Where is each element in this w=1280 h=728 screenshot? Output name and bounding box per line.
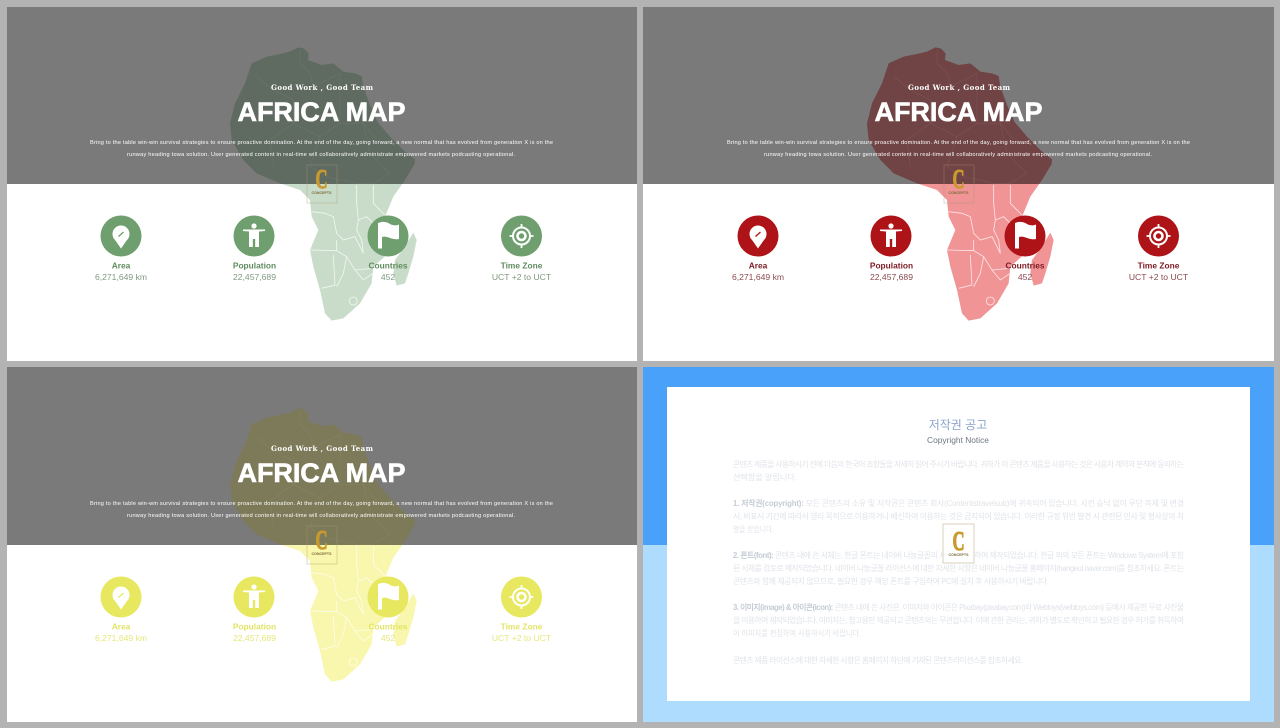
notice body: 콘텐츠 제품 라이선스에 대한 자세한 사항은 홈페이지 하단에 기재된 콘텐츠라이선스를 참조하세요. [733,655,1023,665]
tagline: Good Work , Good Team [271,444,374,453]
map of Africa [867,47,1054,321]
description [90,501,553,519]
stat: time zone [492,216,552,282]
stat: area: 6,271,649 km [732,272,784,282]
stat: time zone [492,576,552,643]
stat: area [95,216,147,282]
notice body: 이 이미지를 편집하여 사용하시기 바랍니다. [733,628,861,638]
map of Africa [230,408,417,682]
stat: area: Area [112,260,131,270]
panel: red slide [643,7,1274,361]
stat: population: 22,457,689 [233,272,276,282]
stat: population: Population [233,622,276,632]
notice body: 벌을 받습니다. [733,524,774,534]
stat: countries: Countries [1005,260,1045,270]
logo: C [315,164,328,194]
description: runway heading towa solution. User generated content in real-time will collaboratively administrate empowered markets podcasting operational. [127,513,515,519]
logo: CONCEPTS [312,552,332,556]
notice body: 선택함을 알립니다. [733,472,797,482]
stat: population [233,216,276,282]
stat: time zone: UCT +2 to UCT [492,633,552,643]
description: Bring to the table win-win survival strategies to ensure proactive domination. At the end of the day, going forward, a new normal that has evolved from generation X is on the [727,140,1190,146]
stat: time zone [1129,216,1189,282]
stat: countries: 452 [381,633,395,643]
description: runway heading towa solution. User generated content in real-time will collaboratively administrate empowered markets podcasting operational. [764,152,1152,158]
stat: population [233,576,276,643]
description: runway heading towa solution. User generated content in real-time will collaboratively administrate empowered markets podcasting operational. [127,152,515,158]
description [727,140,1190,158]
blue background upper [643,367,1274,545]
logo [944,164,974,203]
stat: area [732,216,784,282]
logo: C [952,526,965,556]
stat: time zone: Time Zone [501,622,543,632]
panel: yellow slide [7,367,637,722]
stat: time zone: Time Zone [501,260,543,270]
notice subtitle: Copyright Notice [927,435,989,445]
tagline: Good Work , Good Team [908,83,1011,92]
stat: population: 22,457,689 [870,272,913,282]
logo [943,524,974,563]
stat: population [870,216,913,282]
notice body: 시, 비표시 기간에 따라서 영리 목적으로 이용하거나 배신하여 이용하는 것은 금지되어 있습니다. 이러한 규정 위반 발견 시 관련된 민사 및 형사상의 처 [733,511,1184,521]
stat: area: 6,271,649 km [95,272,147,282]
panel: copyright notice slide [643,367,1274,722]
header band [7,367,637,545]
blue background lower [643,545,1274,722]
notice body: 콘텐츠 제품을 사용하시기 전에 다음의 한국어 조항들을 자세히 읽어 주시기 바랍니다. 귀하가 이 콘텐츠 제품을 사용하는 것은 사용자 계약과 본칙에 동의하는 [733,459,1184,469]
description [90,140,553,158]
stat: time zone: UCT +2 to UCT [492,272,552,282]
slide background [7,7,637,361]
stat: area: 6,271,649 km [95,633,147,643]
notice body: 2. 폰트(font): 콘텐츠 내에 쓴 서체는, 한글 폰트는 네이버 나눔글꼴의 서체를 이용하여 제작되었습니다. 한글 외의 모든 폰트는 Windows System에 포함 [733,550,1184,560]
map of Africa [230,47,417,321]
stat: area [95,576,147,643]
panel: green slide [7,7,637,361]
notice title: 저작권 공고 [929,418,987,432]
stat: population: Population [233,260,276,270]
logo: CONCEPTS [949,553,969,557]
notice body: 된 서체를 검토로 제작되었습니다. 네이버 나눔글꼴 라이선스에 대한 자세한 사항은 네이버 나눔글꼴 홈페이지(hangeul.naver.com)를 참조하세요. 폰트는 [733,563,1184,573]
header band [7,7,637,184]
logo: C [315,525,328,555]
stat: countries: Countries [368,260,408,270]
stat: countries: 452 [381,272,395,282]
stat: countries [1004,216,1046,282]
slide background [643,7,1274,361]
logo: CONCEPTS [312,191,332,195]
logo [307,164,337,203]
stat: countries: Countries [368,622,408,632]
notice body: 3. 이미지(image) & 아이콘(icon): 콘텐츠 내에 쓴 사진은, 이미지와 아이콘은 Pixabay(pixabay.com)와 Webtoys(webtoys.com) 등에서 제공한 무료 사진물 [733,602,1184,612]
stat: area: Area [749,260,768,270]
notice body: 을 이용하여 제작되었습니다. 이미지는, 참고용만 제공되고 콘텐츠와는 무관합니다. 이에 관한 권리는, 귀하가 별도로 확인하고 필요한 경우 허가를 취득하여 [733,615,1184,625]
description: Bring to the table win-win survival strategies to ensure proactive domination. At the end of the day, going forward, a new normal that has evolved from generation X is on the [90,501,553,507]
white card [667,387,1250,701]
logo [307,525,337,564]
stat: population: 22,457,689 [233,633,276,643]
stat: time zone: Time Zone [1138,260,1180,270]
notice body [733,459,1184,665]
stat: population: Population [870,260,913,270]
title: AFRICA MAP [238,97,406,127]
title: AFRICA MAP [874,97,1042,127]
tagline: Good Work , Good Team [271,83,374,92]
stat: countries [368,576,408,643]
slide background [7,367,637,722]
description: Bring to the table win-win survival strategies to ensure proactive domination. At the end of the day, going forward, a new normal that has evolved from generation X is on the [90,140,553,146]
stat: countries [368,216,408,282]
title: AFRICA MAP [238,458,406,488]
notice body: 콘텐츠와 함께 제공되지 않으므로, 필요한 경우 해당 폰트를 구입하여 PC에 설치 후 사용하시기 바랍니다. [733,576,1049,586]
logo: C [952,164,965,194]
stat: countries: 452 [1018,272,1032,282]
header band [643,7,1274,184]
stat: time zone: UCT +2 to UCT [1129,272,1189,282]
notice body: 1. 저작권(copyright): 모든 콘텐츠의 소유 및 저작권은 콘텐츠 회사(Contentstravelsub)에 귀속되어 있습니다. 사전 승낙 없이 무단 복제 및 변경 [733,498,1184,508]
stat: area: Area [112,622,131,632]
logo: CONCEPTS [949,191,969,195]
